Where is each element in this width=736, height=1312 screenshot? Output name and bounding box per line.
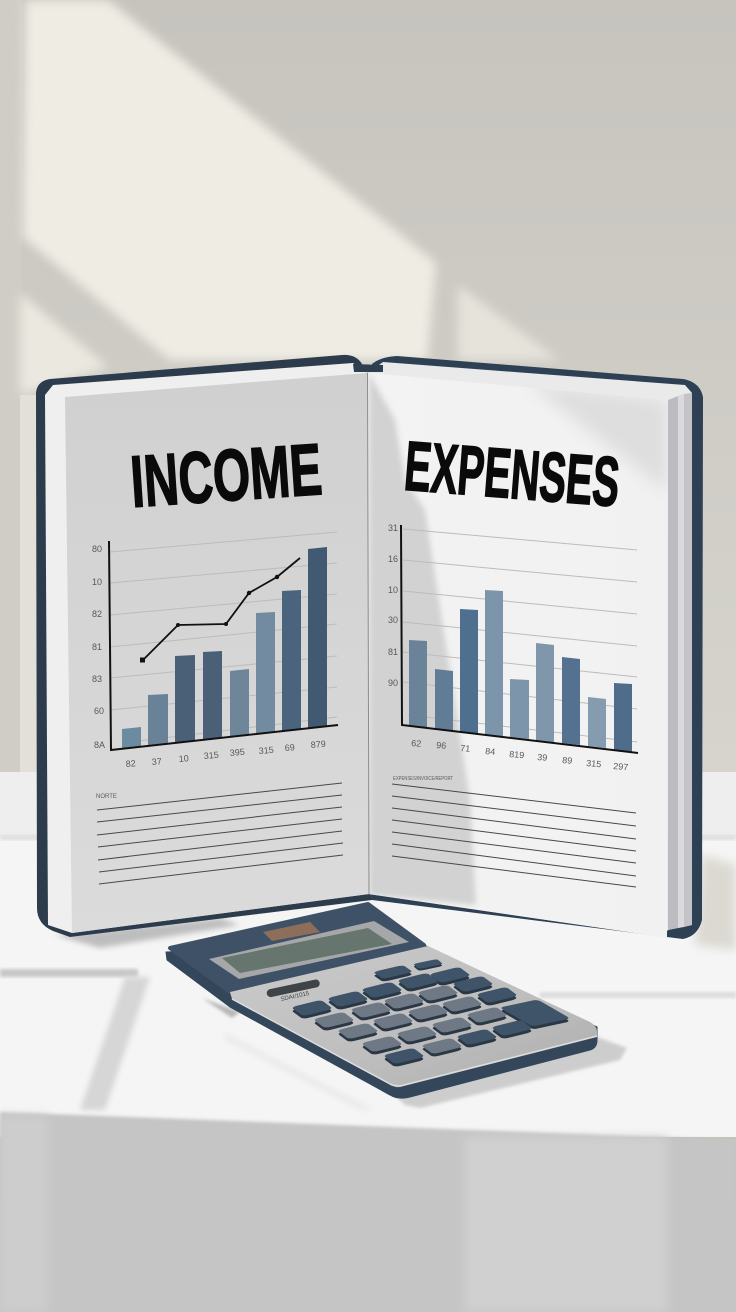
income y labels: 80: [92, 544, 102, 554]
income y labels: 60: [94, 706, 104, 716]
income y labels: 81: [92, 642, 102, 652]
small slot: [266, 979, 320, 998]
page stack: left: [45, 363, 369, 933]
expenses y labels: 16: [388, 554, 398, 564]
income x labels: 37: [151, 756, 162, 767]
expenses x labels: 39: [537, 752, 548, 763]
notes label: NORTE: [96, 794, 117, 800]
income trend line: [140, 558, 300, 662]
expenses x labels: 96: [436, 740, 447, 751]
income x labels: 82: [125, 758, 136, 769]
expenses x labels: 315: [586, 758, 602, 769]
calculator base: [166, 945, 597, 1098]
note lines: [392, 784, 636, 887]
expenses y labels: 30: [388, 615, 398, 625]
heading: expenses: EXPENSES: [402, 427, 622, 522]
table surface: [0, 772, 736, 1137]
left page: [65, 373, 369, 933]
income y labels: 82: [92, 609, 102, 619]
notes label: EXPENSES/INVOICE/REPORT: [393, 776, 453, 782]
right page shading: [369, 373, 668, 905]
shadow band on right page: [541, 389, 668, 484]
expenses notes: [392, 776, 636, 887]
book cover: right: [372, 356, 703, 939]
expenses x labels: 84: [485, 746, 496, 757]
key shadows: [291, 961, 570, 1067]
expenses axes: [401, 525, 638, 753]
right page: [368, 373, 668, 938]
calculator dark top panel: [170, 904, 424, 992]
spine line: [368, 373, 369, 894]
income x labels: 69: [284, 742, 295, 753]
floor band: [0, 1112, 736, 1312]
calculator silver body: [230, 946, 597, 1087]
book cover: left: [36, 355, 372, 937]
income x labels: 879: [310, 739, 326, 750]
income notes: [96, 783, 343, 884]
display bezel: [209, 921, 409, 979]
expenses gridlines: [403, 529, 637, 742]
note lines: [97, 783, 343, 884]
income chart: [92, 532, 338, 769]
income x labels: 395: [229, 747, 245, 758]
solar panel: [263, 922, 320, 941]
expenses x labels: [411, 738, 629, 772]
expenses bars: [409, 590, 632, 752]
shadow on left of right page: [369, 373, 476, 905]
income x labels: 10: [178, 753, 189, 764]
expenses y labels: 10: [388, 585, 398, 595]
income gridlines: [110, 532, 337, 743]
model label: SDAI/1015: [280, 991, 310, 1003]
income y labels: 8A: [94, 740, 105, 750]
expenses chart: [388, 523, 638, 772]
wall background: [0, 0, 736, 775]
dark blue keys: [291, 959, 570, 1064]
expenses x labels: 89: [562, 755, 573, 766]
silver front rim: [232, 999, 597, 1086]
page stack: right: [368, 362, 692, 937]
expenses x labels: 297: [613, 761, 629, 772]
income bars: [122, 547, 327, 748]
right stack stripes: [668, 393, 692, 930]
book: [36, 355, 703, 939]
spine tab: [353, 364, 383, 372]
income y labels: 83: [92, 674, 102, 684]
expenses x labels: 71: [460, 743, 471, 754]
expenses y labels: 90: [388, 678, 398, 688]
expenses x labels: 819: [509, 749, 525, 760]
expenses y labels: 81: [388, 647, 398, 657]
income x labels: [125, 739, 326, 769]
income y labels: [92, 544, 105, 750]
income y labels: 10: [92, 577, 102, 587]
heading: income: INCOME: [128, 429, 324, 524]
display: [222, 928, 392, 973]
income x labels: 315: [258, 745, 274, 756]
expenses y labels: [388, 523, 398, 688]
gray keys: [313, 985, 508, 1054]
book shadow: [55, 918, 240, 948]
income x labels: 315: [203, 750, 219, 761]
calculator: [166, 904, 597, 1098]
income axes: [109, 541, 338, 750]
calculator shadow: [202, 998, 627, 1110]
expenses y labels: 31: [388, 523, 398, 533]
expenses x labels: 62: [411, 738, 422, 749]
